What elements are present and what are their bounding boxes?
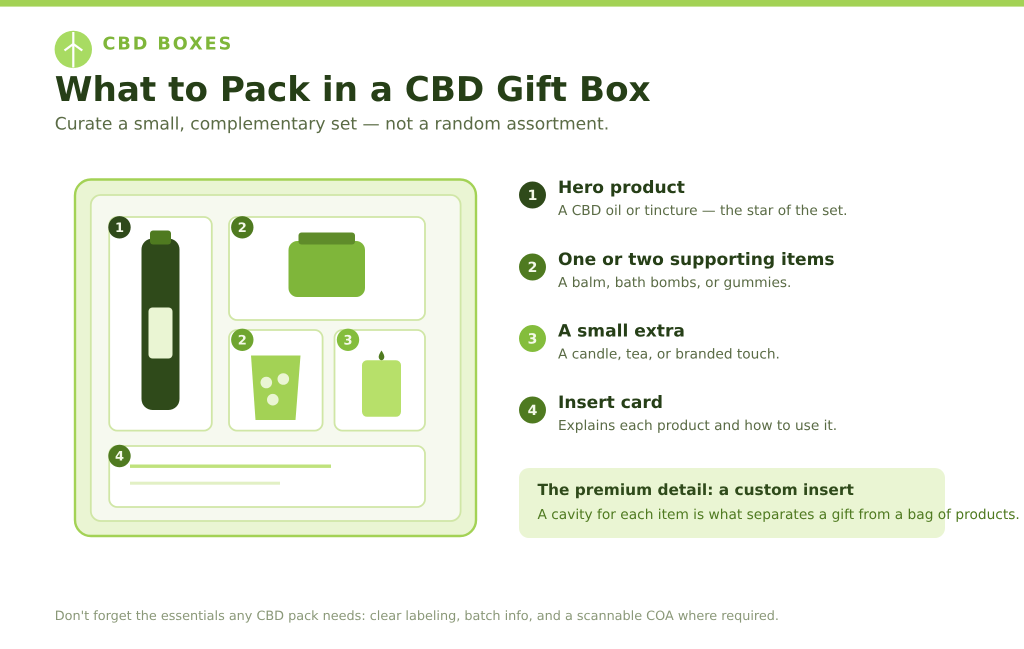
- icon: balm jar: [288, 232, 365, 297]
- item 1: 1: [528, 188, 537, 204]
- badge 2: 2: [238, 334, 247, 348]
- item 1: Hero product: [558, 178, 685, 198]
- callout: [519, 468, 1020, 538]
- badge 2: 2: [238, 221, 247, 236]
- item 2: One or two supporting items: [558, 250, 835, 270]
- item 3: A small extra: [558, 322, 685, 342]
- compartment 1: hero product: [108, 216, 212, 431]
- item 3: 3: [528, 332, 537, 348]
- panel: gift box diagram: [75, 180, 476, 536]
- icon: gummies cup: [251, 356, 300, 420]
- item 2: A balm, bath bombs, or gummies.: [558, 275, 791, 291]
- title: What to Pack in a CBD Gift Box: [55, 70, 651, 110]
- badge 4: 4: [115, 450, 124, 465]
- item 4: [519, 393, 837, 434]
- badge 2: [231, 216, 254, 238]
- badge 1: 1: [115, 221, 124, 236]
- compartment 3: candle: [334, 329, 425, 431]
- badge 4: [108, 445, 131, 467]
- list of contents: [519, 178, 847, 434]
- header: [55, 31, 651, 135]
- icon: candle: [362, 350, 401, 417]
- item 3: [519, 322, 780, 362]
- icon: logo leaf: [55, 31, 92, 68]
- compartment 2: gummies: [229, 329, 323, 431]
- badge 3: 3: [343, 334, 353, 348]
- item 3: A candle, tea, or branded touch.: [558, 346, 780, 362]
- item 4: Explains each product and how to use it.: [558, 418, 837, 434]
- card text lines: [130, 464, 331, 485]
- box inner tray: [91, 195, 461, 521]
- icon: tincture bottle: [142, 230, 180, 410]
- item 2: [519, 250, 835, 291]
- item 1: A CBD oil or tincture — the star of the set.: [558, 203, 847, 219]
- brand name: CBD BOXES: [102, 34, 233, 54]
- badge 1: [108, 216, 131, 238]
- compartment 2: jar: [229, 216, 425, 320]
- callout: A cavity for each item is what separates a gift from a bag of products.: [538, 507, 1020, 523]
- subtitle: Curate a small, complementary set — not a random assortment.: [55, 114, 609, 134]
- compartment 4: insert card: [108, 445, 425, 507]
- footnote: Don't forget the essentials any CBD pack needs: clear labeling, batch info, and a scannable COA where required.: [55, 609, 779, 624]
- item 4: Insert card: [558, 393, 663, 413]
- callout: The premium detail: a custom insert: [538, 481, 854, 499]
- box outer: [75, 180, 476, 536]
- item 2: 2: [528, 260, 537, 276]
- item 1: [519, 178, 847, 219]
- item 4: 4: [528, 403, 538, 419]
